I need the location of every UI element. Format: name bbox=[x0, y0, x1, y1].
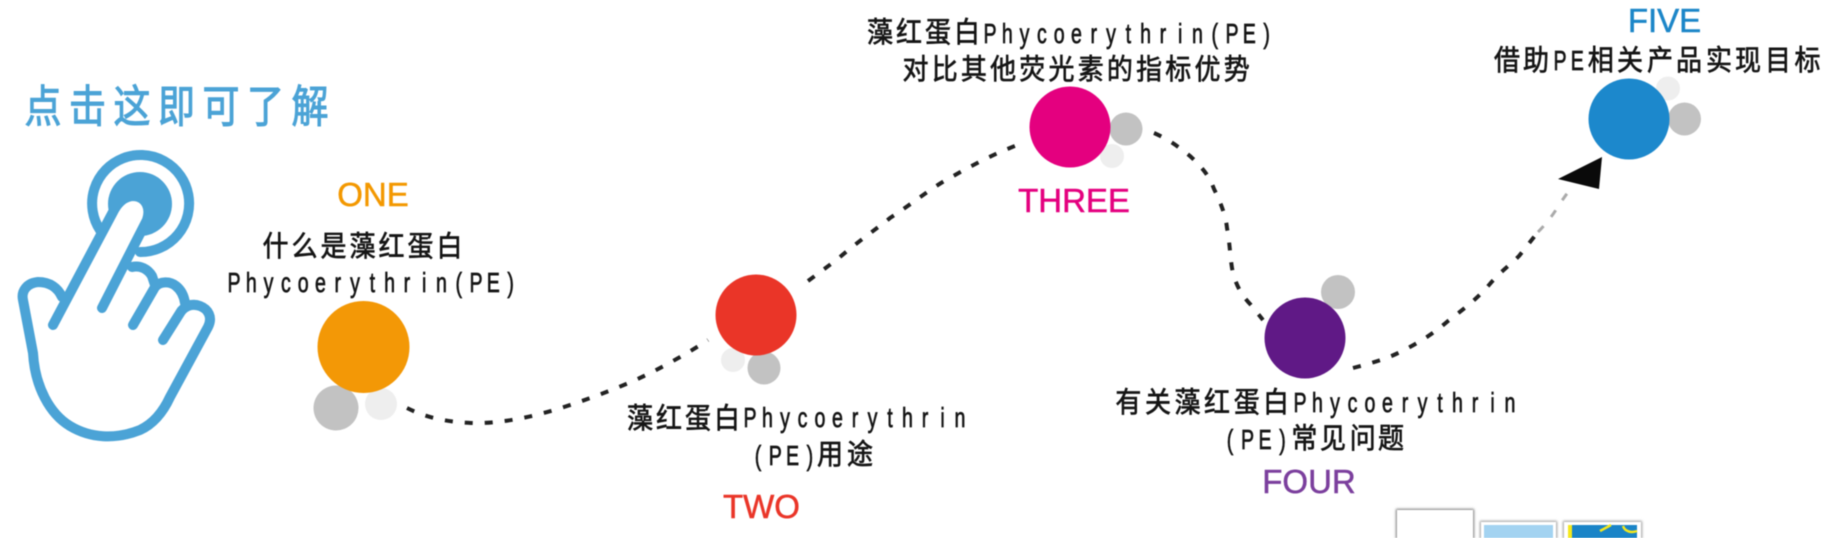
step five: label: 借助 bbox=[1494, 44, 1549, 76]
step three: heading: THREE bbox=[1018, 182, 1130, 219]
step four: heading: FOUR bbox=[1262, 463, 1356, 500]
step five: heading: FIVE bbox=[1628, 2, 1701, 39]
dashed path: one to two bbox=[407, 340, 708, 423]
step two: label: Phycoerythrin bbox=[743, 403, 965, 434]
title: click to learn: 点击这即可了解 bbox=[24, 82, 329, 132]
step three: label: 藻红蛋白 bbox=[867, 16, 980, 48]
step four: label: Phycoerythrin bbox=[1293, 388, 1515, 419]
step five: label: PE bbox=[1553, 46, 1584, 77]
step three: label bbox=[867, 16, 1270, 85]
icon: hand pressing button bbox=[23, 155, 210, 436]
step two: node bbox=[716, 274, 796, 384]
thumbnail cards bbox=[1396, 509, 1642, 538]
step two: label: (PE) bbox=[755, 441, 813, 472]
step five: label: 相关产品实现目标 bbox=[1588, 44, 1820, 76]
step one: label: Phycoerythrin(PE) bbox=[227, 268, 514, 299]
step three: label: 对比其他荧光素的指标优势 bbox=[903, 53, 1250, 85]
dashed path: two to three bbox=[808, 145, 1017, 281]
step four: label bbox=[1115, 386, 1515, 456]
step two: heading: TWO bbox=[723, 488, 800, 525]
step four: label: 有关藻红蛋白 bbox=[1115, 386, 1289, 418]
step two: label bbox=[627, 402, 965, 472]
step one: heading: ONE bbox=[337, 176, 409, 213]
dashed path: three to four bbox=[1154, 133, 1263, 320]
dashed path: four to five bbox=[1353, 232, 1538, 368]
step four: label: 常见问题 bbox=[1291, 422, 1404, 454]
step two: label: 用途 bbox=[817, 438, 873, 470]
step four: node bbox=[1264, 275, 1355, 378]
step five: node bbox=[1588, 76, 1701, 160]
step one: node bbox=[314, 301, 410, 430]
dashed path: fading end bbox=[1538, 185, 1573, 232]
step one: label bbox=[227, 230, 514, 299]
step one: label: 什么是藻红蛋白 bbox=[263, 230, 462, 262]
step four: label: (PE) bbox=[1227, 425, 1286, 456]
step two: label: 藻红蛋白 bbox=[627, 402, 740, 434]
step three: label: Phycoerythrin(PE) bbox=[983, 19, 1270, 50]
step five: label bbox=[1494, 44, 1820, 77]
step three: node bbox=[1030, 86, 1142, 168]
arrow head bbox=[1558, 157, 1602, 189]
